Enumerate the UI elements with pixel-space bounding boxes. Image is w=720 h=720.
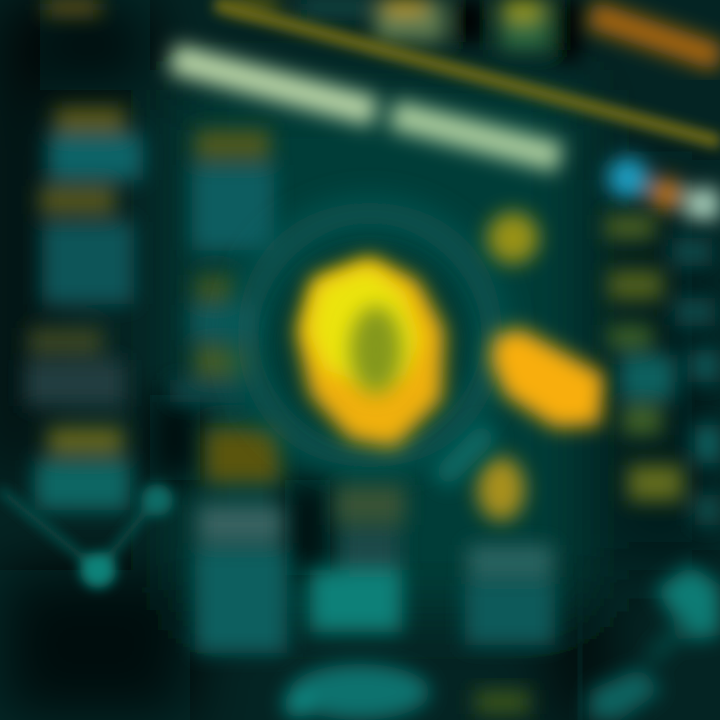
left block 1 [48, 108, 143, 180]
row 5 [628, 465, 720, 525]
yellow dot bottom [477, 457, 525, 521]
row 1 [605, 215, 712, 266]
column block 2 [190, 275, 255, 340]
lower right block [465, 580, 555, 645]
left block 2 [40, 186, 134, 304]
column block 3 [170, 345, 250, 402]
olive block [205, 428, 280, 483]
title band [172, 58, 560, 158]
top header strip [45, 0, 580, 60]
left block 4 [35, 428, 130, 510]
bottom label [475, 690, 530, 714]
panel: lower center [310, 485, 555, 645]
row 4 [622, 405, 720, 463]
lower right network [588, 565, 720, 720]
left block 3 [25, 328, 125, 406]
header divider line [215, 4, 720, 142]
network diagram [0, 484, 173, 588]
legend orange dot [649, 177, 683, 211]
row 2 [608, 270, 715, 326]
orange header banner [590, 14, 720, 58]
center label [335, 485, 405, 525]
center gray block [340, 530, 400, 570]
teal connector [440, 430, 490, 480]
yellow dot top [487, 212, 539, 264]
panel: right legend [607, 157, 720, 220]
panel: left column [25, 108, 143, 510]
legend blue dot [607, 157, 649, 199]
lower block [195, 505, 287, 653]
orange callout [490, 328, 605, 428]
column block 1 [192, 130, 274, 250]
legend pale bar [686, 188, 720, 220]
center teal block [310, 570, 402, 632]
row 3 [608, 325, 720, 400]
bottom gear icon [284, 664, 430, 720]
lower right label [468, 545, 553, 577]
panel: second column [170, 130, 287, 653]
central ring [248, 213, 492, 457]
right column rows [605, 215, 720, 525]
central yellow badge [296, 256, 445, 448]
